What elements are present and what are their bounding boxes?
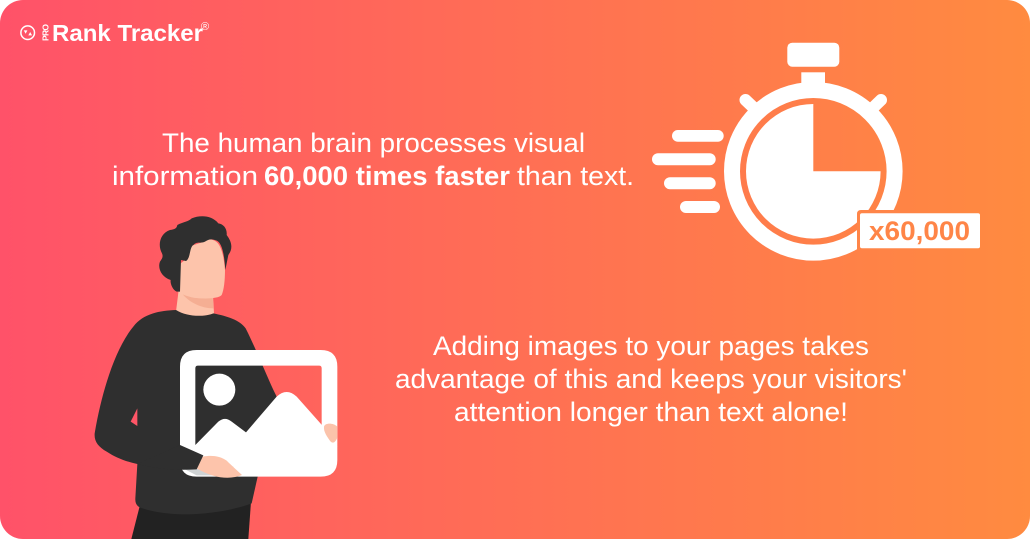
logo wordmark: Rank Tracker — [52, 20, 203, 46]
hair — [159, 216, 231, 292]
text block: adding images advice: attention longer than text alone! — [454, 397, 848, 427]
neck shadow — [183, 294, 213, 308]
text block: brain processing fact — [112, 128, 634, 191]
neck — [176, 290, 214, 316]
badge: x60,000 — [857, 210, 980, 250]
logo: Rank Tracker — [21, 20, 209, 46]
fingers on right edge — [324, 424, 337, 443]
gap between arm and torso — [131, 408, 137, 426]
text block: brain processing fact: than text. — [517, 161, 634, 191]
stopwatch side ears — [746, 100, 881, 109]
stopwatch button — [787, 43, 839, 67]
speed lines — [652, 130, 724, 213]
logo registered mark: ® — [201, 21, 209, 33]
text block: brain processing fact: The human brain processes visual — [162, 128, 585, 158]
torso and arm — [95, 310, 277, 514]
stopwatch ring — [732, 90, 895, 253]
hand — [197, 456, 242, 478]
text block: adding images advice: Adding images to your pages takes — [433, 331, 869, 361]
picture mountains — [195, 392, 337, 447]
sleeve over frame — [137, 445, 203, 470]
illustration: person holding image — [95, 216, 337, 539]
trousers — [131, 502, 251, 539]
logo PRO mark: PRO — [40, 24, 50, 41]
stopwatch stem — [801, 72, 825, 94]
logo icon — [21, 26, 34, 40]
picture sun — [203, 374, 235, 406]
badge: x60,000: x60,000 — [869, 216, 970, 246]
text block: adding images advice: advantage of this and keeps your visitors' — [395, 364, 907, 394]
text block: brain processing fact: 60,000 times faster — [264, 161, 511, 191]
text block: adding images advice — [395, 331, 907, 427]
face — [179, 239, 225, 298]
picture frame — [180, 350, 337, 477]
icon: stopwatch with speed lines — [652, 43, 980, 253]
frame shadow under hand — [185, 463, 233, 475]
text block: brain processing fact: information — [112, 161, 258, 191]
stopwatch dial — [746, 104, 881, 239]
